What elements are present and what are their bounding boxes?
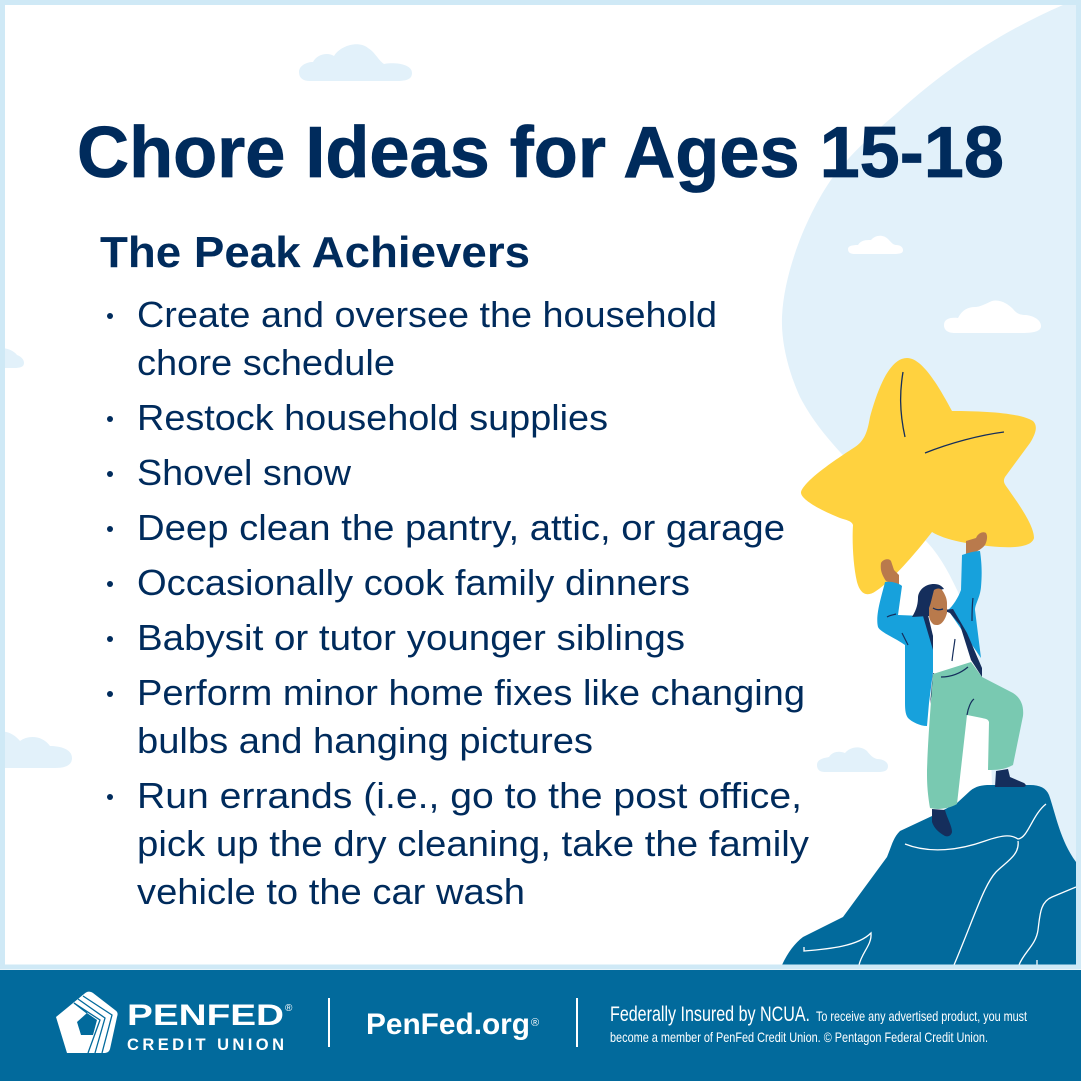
clothing details bbox=[887, 598, 974, 715]
chore list: Perform minor home fixes like changing bbox=[137, 672, 805, 713]
star bbox=[801, 358, 1036, 594]
chore list: Create and oversee the household bbox=[137, 294, 717, 335]
chore list: bulbs and hanging pictures bbox=[137, 720, 593, 761]
divider bbox=[328, 998, 330, 1047]
website: PenFed.org bbox=[366, 1008, 530, 1041]
right shoe bbox=[995, 769, 1026, 787]
jacket lining bbox=[923, 609, 982, 704]
PenFed wordmark: CREDIT UNION bbox=[127, 1036, 284, 1054]
chore list: Restock household supplies bbox=[137, 397, 608, 438]
heading: The Peak Achievers: The Peak Achievers bbox=[100, 228, 530, 277]
chore list bbox=[107, 294, 809, 912]
PenFed logo mark bbox=[56, 992, 118, 1053]
title: Chore Ideas for Ages 15-18 bbox=[77, 113, 1004, 193]
white shirt bbox=[933, 611, 972, 674]
chore list: Babysit or tutor younger siblings bbox=[137, 617, 685, 658]
website: ® bbox=[531, 1017, 539, 1029]
chore list: Run errands (i.e., go to the post office, bbox=[137, 775, 802, 816]
chore list: Shovel snow bbox=[137, 452, 352, 493]
chore list: pick up the dry cleaning, take the family bbox=[137, 823, 809, 864]
right hand bbox=[966, 532, 987, 556]
PenFed wordmark: PENFED bbox=[127, 999, 284, 1032]
background moon shape bbox=[782, 5, 1076, 862]
head bbox=[929, 588, 947, 625]
footer band bbox=[0, 970, 1081, 1081]
divider bbox=[576, 998, 578, 1047]
left hand bbox=[881, 559, 899, 587]
clouds on white background bbox=[0, 44, 888, 772]
legal disclaimer: Federally Insured by NCUA. bbox=[610, 1003, 810, 1026]
legal disclaimer bbox=[610, 1003, 1027, 1045]
PenFed wordmark bbox=[127, 999, 293, 1054]
chore list: chore schedule bbox=[137, 342, 395, 383]
white clouds on moon bbox=[848, 236, 1041, 333]
jacket bbox=[877, 551, 982, 726]
trousers bbox=[927, 662, 1023, 809]
chore list: Deep clean the pantry, attic, or garage bbox=[137, 507, 785, 548]
hair bbox=[912, 584, 944, 617]
chore list: vehicle to the car wash bbox=[137, 871, 525, 912]
PenFed wordmark: ® bbox=[285, 1003, 293, 1014]
chore list: Occasionally cook family dinners bbox=[137, 562, 690, 603]
mountain bbox=[782, 785, 1076, 965]
left shoe bbox=[932, 809, 952, 836]
person lifting star bbox=[877, 532, 1026, 836]
